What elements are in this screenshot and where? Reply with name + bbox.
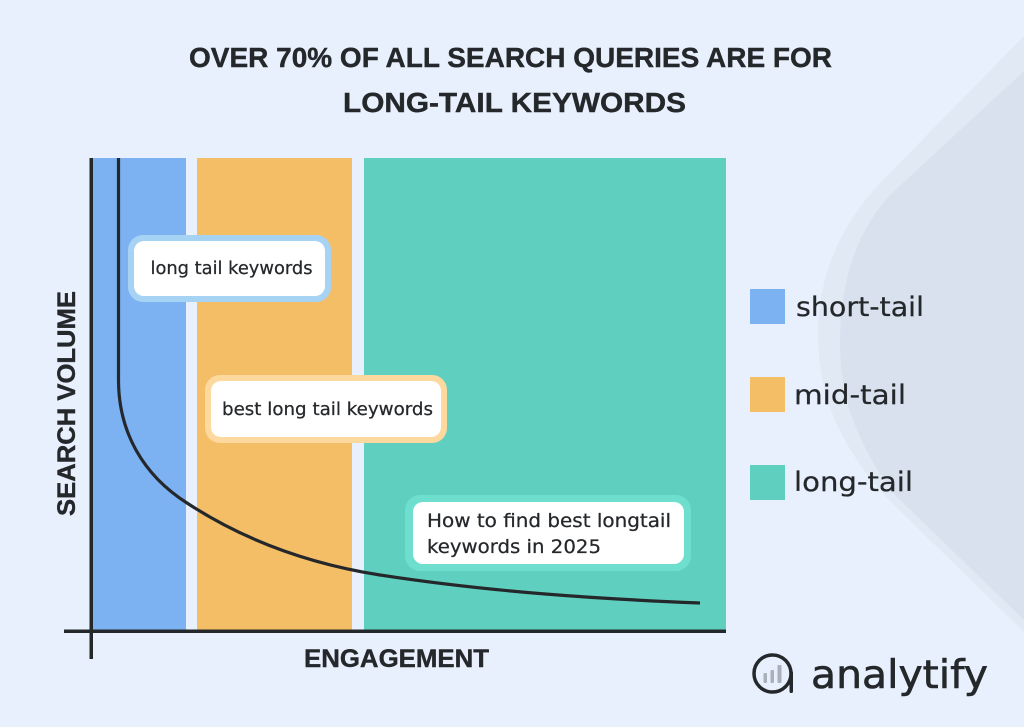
logo: analytify: analytify [811,653,988,698]
callout: how to find best longtail keywords [405,495,691,571]
callout: how to find best longtail keywords: keywords in 2025 [427,536,601,558]
band: short-tail [92,158,186,630]
legend item: long-tail: long-tail [794,467,913,498]
title: LONG-TAIL KEYWORDS [343,87,686,118]
callout: best long tail keywords: best long tail keywords [222,400,433,420]
long-tail curve [118,158,700,603]
x axis label: ENGAGEMENT [304,645,489,673]
callout: long tail keywords [128,235,331,302]
title: OVER 70% OF ALL SEARCH QUERIES ARE FOR [189,42,832,73]
chart: search volume vs engagement [64,158,726,659]
legend item: long-tail [750,465,913,500]
legend item: mid-tail [750,377,906,412]
title [189,42,832,118]
legend item: mid-tail: mid-tail [794,380,906,411]
legend [750,289,924,500]
legend item: short-tail: short-tail [796,292,924,323]
band: mid-tail [197,158,352,630]
callout: how to find best longtail keywords: How to find best longtail [427,510,671,532]
background shape: inner arrow [840,71,1024,620]
icon: analytics mark [754,655,793,693]
callout: best long tail keywords [205,375,447,443]
callout: long tail keywords: long tail keywords [150,259,312,279]
x axis [64,630,726,633]
band: long-tail [364,158,726,630]
y axis label: SEARCH VOLUME [53,291,81,516]
legend item: short-tail [750,289,924,324]
y axis [90,158,93,659]
background shape: outer arrow [818,36,1024,632]
